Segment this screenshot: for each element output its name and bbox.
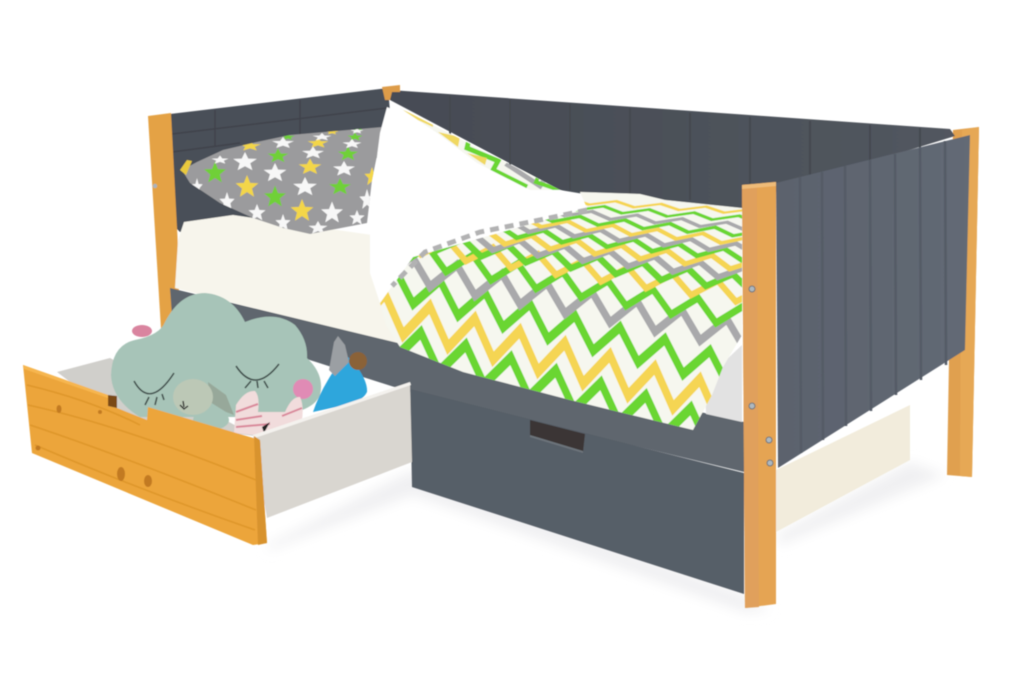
cream under-bed box bbox=[776, 405, 910, 532]
back upholstered panel bbox=[390, 90, 955, 210]
illustration: daybed with storage drawers bbox=[22, 84, 980, 610]
plush rabbit bbox=[173, 379, 234, 430]
toys in drawer bbox=[111, 293, 367, 436]
grey storage drawer bbox=[410, 389, 744, 594]
pillow with stars bbox=[180, 125, 383, 234]
floor shadows bbox=[267, 462, 945, 612]
folded white blanket flap bbox=[370, 107, 587, 303]
side rail bbox=[170, 288, 744, 472]
left wooden post bbox=[148, 113, 180, 329]
striped toy bbox=[234, 391, 303, 436]
drawer back interior bbox=[57, 358, 255, 436]
cloud cushion bbox=[111, 293, 321, 417]
pink toy ear bbox=[132, 325, 152, 337]
front wooden post bbox=[742, 182, 776, 608]
right upholstered side panel bbox=[776, 135, 970, 468]
pine drawer front bbox=[23, 365, 267, 545]
centre wooden post top bbox=[382, 85, 400, 100]
rear right wooden post bbox=[947, 127, 979, 477]
blue toy bbox=[313, 336, 367, 412]
mattress with white sheet bbox=[175, 215, 398, 345]
chevron blanket bbox=[380, 191, 743, 431]
sheet under far end of blanket bbox=[705, 345, 742, 422]
left headboard panel bbox=[170, 88, 392, 232]
drawer side panel bbox=[253, 382, 412, 518]
